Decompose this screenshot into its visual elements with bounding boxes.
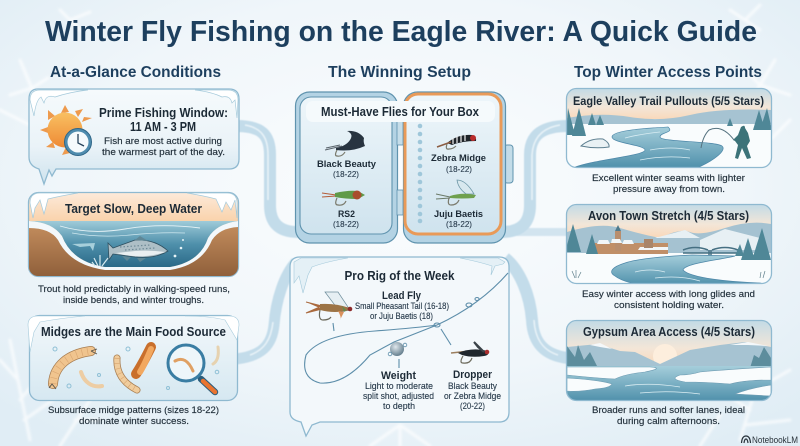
column: top winter access points bbox=[565, 64, 772, 427]
frost caps bbox=[30, 90, 238, 118]
icon: dropper fly bbox=[451, 342, 489, 363]
label: weight bbox=[363, 370, 434, 411]
column: at-a-glance conditions bbox=[28, 64, 239, 427]
fly: juju baetis: Juju Baetis bbox=[434, 209, 483, 220]
text: gypsum caption: Broader runs and softer lanes, ideal bbox=[592, 405, 745, 416]
text: eagle valley caption: pressure away from town. bbox=[613, 184, 725, 195]
text: prime fishing window: Prime Fishing Window: bbox=[99, 106, 228, 120]
panel: prime fishing window bbox=[29, 89, 239, 184]
text: gypsum caption bbox=[592, 405, 745, 427]
connecting ice rivers bbox=[236, 125, 568, 359]
latch bbox=[504, 145, 513, 183]
text: prime fishing window: the warmest part of the day. bbox=[102, 147, 225, 158]
fly: rs2: (18-22) bbox=[333, 219, 359, 229]
fly: juju baetis bbox=[434, 180, 483, 229]
label: lead fly: Lead Fly bbox=[382, 290, 422, 302]
label: Target Slow, Deep Water bbox=[65, 201, 202, 216]
fly: black beauty: (18-22) bbox=[333, 169, 359, 179]
label: dropper: Black Beauty bbox=[448, 381, 498, 391]
heading: at-a-glance conditions: At-a-Glance Conditions bbox=[50, 64, 221, 81]
box right half bbox=[404, 92, 506, 243]
text: prime fishing window: Fish are most active during bbox=[104, 136, 222, 147]
bubbles bbox=[53, 347, 219, 390]
fly: zebra midge: (18-22) bbox=[446, 164, 472, 174]
text: avon caption: Easy winter access with long glides and bbox=[582, 289, 755, 300]
heading: the winning setup: The Winning Setup bbox=[328, 64, 471, 81]
icon: sun and clock bbox=[40, 105, 92, 156]
snow banks bbox=[567, 367, 771, 396]
fly: black beauty bbox=[317, 131, 377, 179]
river bbox=[567, 366, 771, 401]
midges heading: Midges are the Main Food Source bbox=[41, 325, 226, 339]
label: weight: Light to moderate bbox=[365, 381, 433, 391]
mountains bbox=[567, 223, 771, 255]
label: Gypsum Area Access (4/5 Stars) bbox=[583, 325, 755, 339]
icon: lead fly bbox=[306, 292, 352, 320]
text: trout caption bbox=[38, 284, 230, 306]
icon: midge larvae bbox=[49, 347, 218, 390]
label: dropper: or Zebra Midge bbox=[444, 391, 501, 401]
text: midge caption: Subsurface midge patterns (sizes 18-22) bbox=[48, 405, 219, 416]
text: prime fishing window: 11 AM - 3 PM bbox=[130, 120, 196, 134]
column: the winning setup bbox=[290, 64, 513, 436]
foam dots bbox=[418, 124, 422, 223]
mountains bbox=[567, 342, 771, 368]
label: dropper: (20-22) bbox=[460, 401, 485, 411]
panel: pro rig of the week bbox=[290, 257, 509, 436]
trees bbox=[566, 108, 772, 136]
panel: avon town stretch bbox=[565, 204, 772, 285]
snow rock bbox=[581, 139, 609, 148]
text: midge caption: dominate winter success. bbox=[79, 416, 189, 427]
hinges bbox=[397, 120, 403, 145]
river bbox=[573, 127, 723, 168]
text: avon caption bbox=[582, 289, 755, 311]
text: trout caption: Trout hold predictably in walking-speed runs, bbox=[38, 284, 230, 295]
label: dropper: Dropper bbox=[453, 369, 493, 381]
label: lead fly: or Juju Baetis (18) bbox=[370, 311, 433, 321]
river bbox=[612, 255, 770, 285]
riverbed soil bbox=[29, 227, 238, 276]
panel: target slow, deep water bbox=[28, 192, 238, 277]
icon: weight bbox=[388, 342, 407, 356]
text: eagle valley caption: Excellent winter seams with lighter bbox=[592, 173, 745, 184]
label: lead fly bbox=[355, 290, 449, 321]
trees bbox=[565, 224, 771, 260]
label: dropper bbox=[444, 369, 501, 411]
text: avon caption: consistent holding water. bbox=[614, 300, 724, 311]
text: midge caption bbox=[48, 405, 219, 427]
panel: gypsum area access bbox=[566, 320, 772, 401]
fly: zebra midge: Zebra Midge bbox=[431, 153, 486, 164]
panel: midges bbox=[28, 316, 239, 400]
distant hills bbox=[567, 110, 771, 124]
frost caps bbox=[30, 193, 237, 218]
banner bbox=[306, 101, 495, 122]
label: weight: to depth bbox=[383, 401, 415, 411]
box left half bbox=[296, 92, 398, 243]
label: Eagle Valley Trail Pullouts (5/5 Stars) bbox=[573, 94, 764, 108]
text: trout caption: inside bends, and winter troughs. bbox=[63, 295, 204, 306]
fly: juju baetis: (18-22) bbox=[446, 219, 472, 229]
fly: black beauty: Black Beauty bbox=[317, 159, 377, 170]
label: weight: split shot, adjusted bbox=[363, 391, 434, 401]
icon: magnifying glass bbox=[168, 345, 215, 392]
label: Avon Town Stretch (4/5 Stars) bbox=[588, 209, 749, 223]
text: prime fishing window bbox=[99, 106, 228, 158]
rig line diagram bbox=[305, 273, 508, 383]
title: Winter Fly Fishing on the Eagle River: A Quick Guide bbox=[45, 16, 757, 48]
heading: top winter access points: Top Winter Access Points bbox=[574, 64, 762, 81]
label: lead fly: Small Pheasant Tail (16-18) bbox=[355, 301, 449, 311]
rig heading: Pro Rig of the Week bbox=[344, 269, 455, 283]
label: weight: Weight bbox=[381, 370, 416, 382]
text: gypsum caption: during calm afternoons. bbox=[617, 416, 720, 427]
panel: eagle valley trail pullouts bbox=[566, 88, 772, 168]
panel: fly box bbox=[296, 92, 513, 243]
text: eagle valley caption bbox=[592, 173, 745, 195]
banner text: Must-Have Flies for Your Box bbox=[321, 105, 479, 119]
fly: zebra midge bbox=[431, 135, 486, 174]
frost caps bbox=[294, 258, 505, 293]
sun bbox=[653, 344, 677, 364]
village bbox=[590, 225, 668, 254]
bridge bbox=[682, 246, 738, 256]
icon: trout bbox=[108, 236, 168, 262]
fly: rs2 bbox=[322, 190, 365, 229]
fly fisher bbox=[701, 126, 751, 159]
fly: rs2: RS2 bbox=[338, 209, 355, 220]
